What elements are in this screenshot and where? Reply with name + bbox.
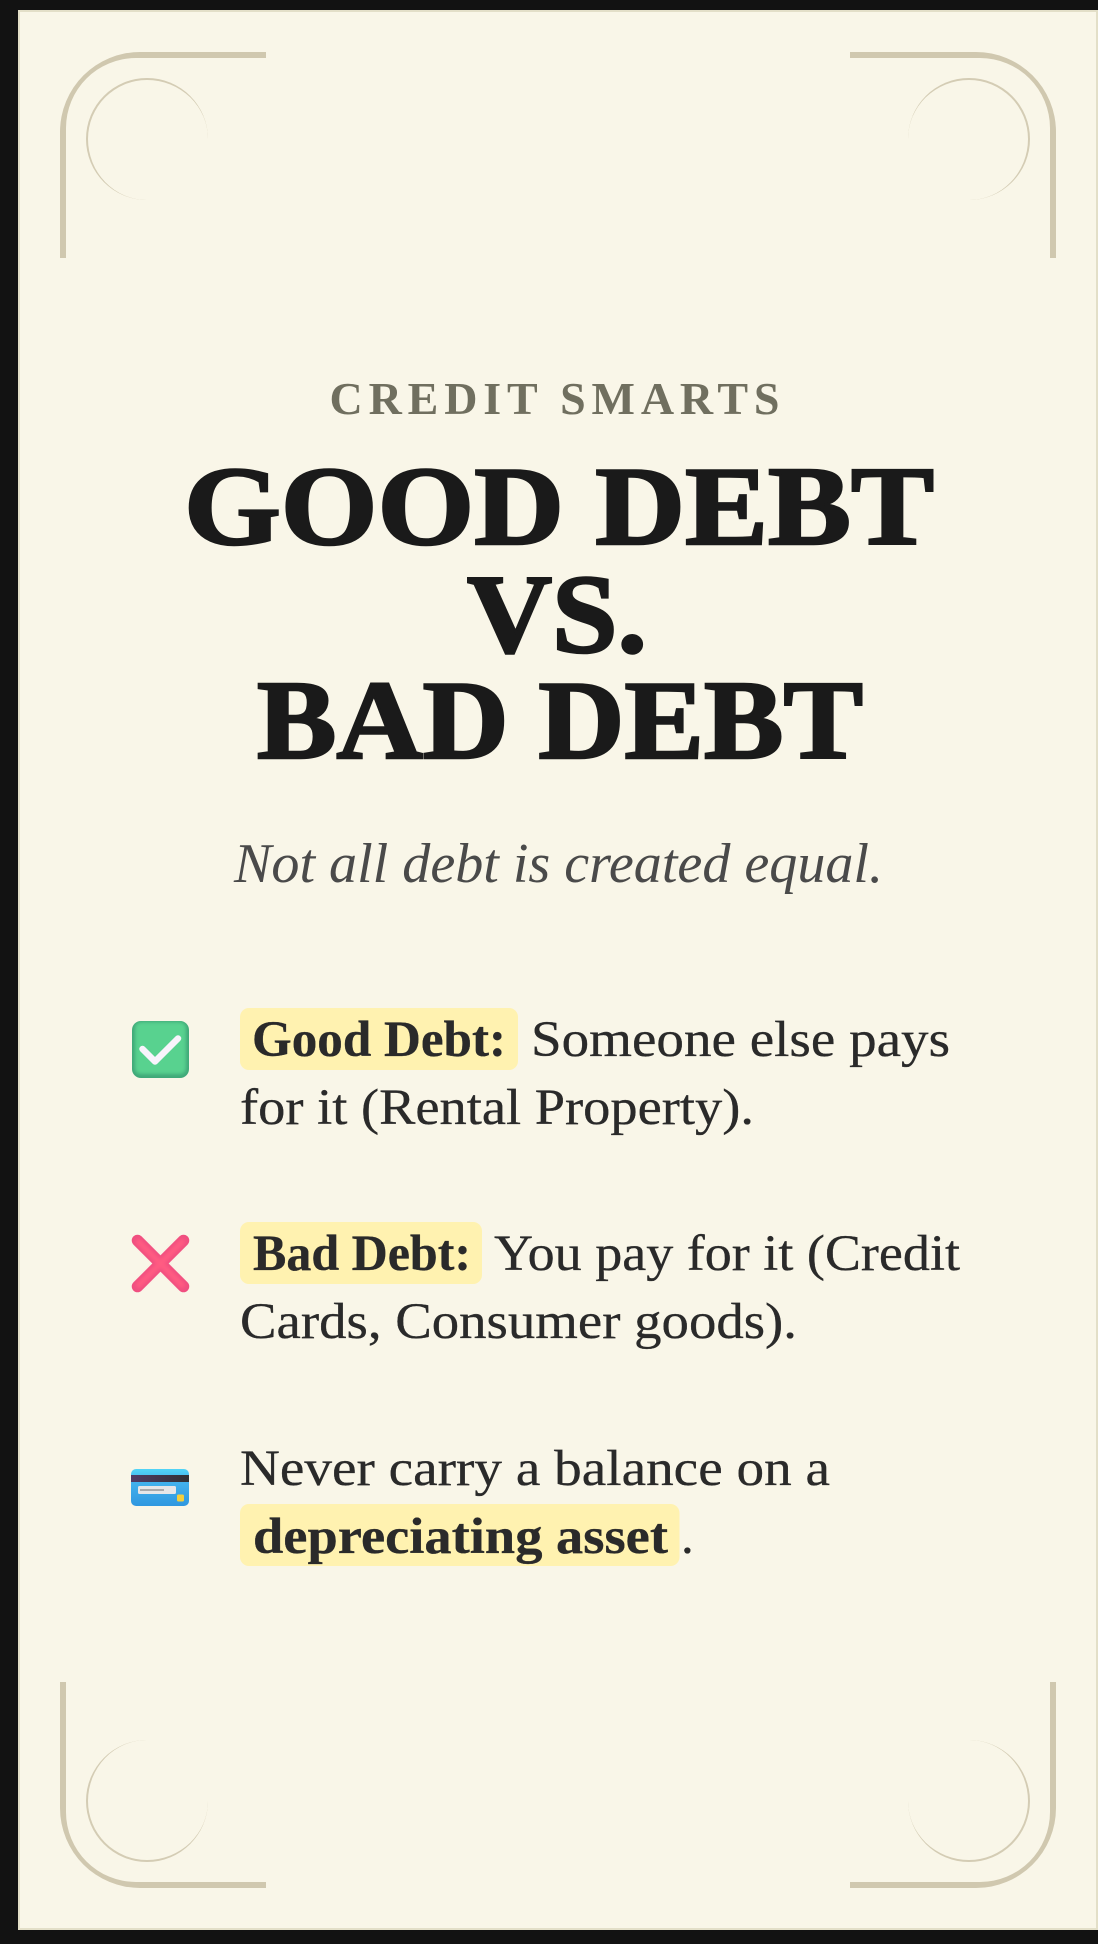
label: bad debt: Bad Debt: (253, 1226, 471, 1282)
period: . (681, 1509, 694, 1565)
label: good debt: Good Debt: (252, 1012, 506, 1068)
text: consumer goods: Cards, Consumer goods). (240, 1294, 797, 1350)
title: GOOD DEBT (184, 445, 934, 569)
list item: depreciating asset (240, 1441, 830, 1566)
text: someone else pays: Someone else pays (531, 1012, 950, 1068)
icon: credit card (131, 1469, 189, 1506)
title: VS. (467, 553, 647, 677)
title: BAD DEBT (257, 659, 863, 783)
list item: good debt (240, 1008, 950, 1136)
list item: bad debt (240, 1222, 960, 1350)
title (184, 445, 934, 783)
corner ornament: top right (850, 52, 1056, 258)
text: you pay for it: You pay for it (Credit (494, 1226, 960, 1282)
icon: green check mark (132, 1021, 189, 1078)
kicker: Credit Smarts: CREDIT SMARTS (330, 373, 780, 424)
subtitle: Not all debt is created equal. (233, 833, 883, 895)
highlight: bad debt (240, 1222, 482, 1284)
corner ornament: top left (60, 52, 266, 258)
highlight: depreciating asset (240, 1504, 680, 1566)
label: depreciating asset: depreciating asset (253, 1509, 668, 1565)
corner ornament: bottom left (60, 1682, 266, 1888)
icon: red cross (138, 1240, 184, 1286)
highlight: good debt (240, 1008, 518, 1070)
text: never carry a balance: Never carry a balance on a (240, 1441, 830, 1497)
text: rental property: for it (Rental Property). (240, 1080, 754, 1136)
corner ornament: bottom right (850, 1682, 1056, 1888)
